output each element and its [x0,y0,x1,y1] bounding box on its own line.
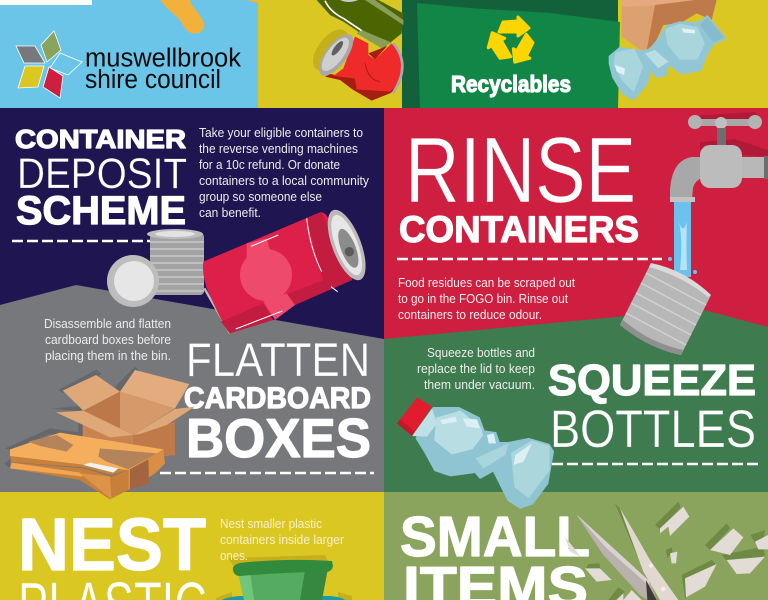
icon: crushed plastic bottle [610,17,725,99]
icon: red drink can [203,205,373,333]
icon: water tap [670,112,768,202]
panel: nest plastic [0,492,384,600]
text: nest description: containers inside larger [220,533,345,547]
text: flatten description: placing them in the bin. [45,349,171,363]
text: flatten description [44,317,171,363]
text: container deposit description: containers to a local community [199,174,370,188]
heading: rinse containers: CONTAINERS [399,209,639,250]
text: squeeze description: replace the lid to keep [417,362,535,376]
text: rinse description: containers to reduce odour. [398,308,542,322]
bin label: Recyclables [451,71,571,97]
text: rinse description: Food residues can be scraped out [398,276,575,290]
heading: flatten cardboard boxes [184,333,371,469]
heading: nest plastic: NEST [18,503,206,586]
bin: green recycling bin [402,0,620,108]
panel: recyclables header [258,0,768,108]
heading: small items: SMALL [400,505,590,569]
panel: container deposit scheme [0,108,384,348]
icon: cardboard piece [622,0,717,50]
icon: squeezed bottle with red cap [397,397,553,507]
logo wordmark: muswellbrook [85,44,241,72]
heading: flatten cardboard boxes: CARDBOARD [184,382,371,415]
heading: container deposit scheme: CONTAINER [15,126,186,154]
text: nest description: Nest smaller plastic [220,517,323,531]
icon: green glass bottle [317,0,403,48]
heading: squeeze bottles [548,356,756,459]
text: nest description [220,517,345,563]
heading: container deposit scheme [15,126,187,233]
heading: rinse containers: RINSE [405,118,636,222]
text: rinse description: to go in the FOGO bin. Rinse out [398,292,568,306]
icon: nested green tub [216,555,352,600]
heading: flatten cardboard boxes: BOXES [186,407,371,469]
heading: small items [400,505,590,600]
heading: squeeze bottles: SQUEEZE [548,356,756,405]
text: squeeze description: them under vacuum. [424,378,535,392]
icon: crushed red can [306,23,402,101]
text: container deposit description: group so someone else [199,190,322,204]
logo wordmark [85,44,241,94]
icon: council star logo [16,31,82,98]
text: container deposit description [199,126,370,220]
text: container deposit description: Take your eligible containers to [199,126,363,140]
panel: logo header [0,0,258,108]
icon: silver coins [107,229,204,307]
heading: flatten cardboard boxes: FLATTEN [186,333,370,386]
heading: container deposit scheme: SCHEME [16,189,186,233]
panel: squeeze bottles [384,309,768,492]
text: squeeze description [417,346,535,392]
icon: scissors and paper scraps [565,502,768,600]
heading: rinse containers [399,118,639,250]
icon: cardboard boxes [4,367,195,499]
icon: running water [668,202,697,277]
heading: container deposit scheme: DEPOSIT [17,150,187,198]
panel: flatten cardboard boxes [0,285,384,492]
text: container deposit description: the reverse vending machines [199,142,358,156]
text: container deposit description: can benefit. [199,206,261,220]
text: rinse description [398,276,575,322]
text: container deposit description: for a 10c refund. Or donate [199,158,340,172]
icon: recycling symbol [483,17,539,68]
panel: rinse containers [384,108,768,348]
text: squeeze description: Squeeze bottles and [427,346,535,360]
text: nest description: ones. [220,549,248,563]
icon: tin can [620,263,711,355]
logo wordmark: shire council [85,66,221,94]
text: flatten description: Disassemble and flatten [44,317,171,331]
text: flatten description: cardboard boxes before [45,333,171,347]
panel: small items [384,492,768,600]
